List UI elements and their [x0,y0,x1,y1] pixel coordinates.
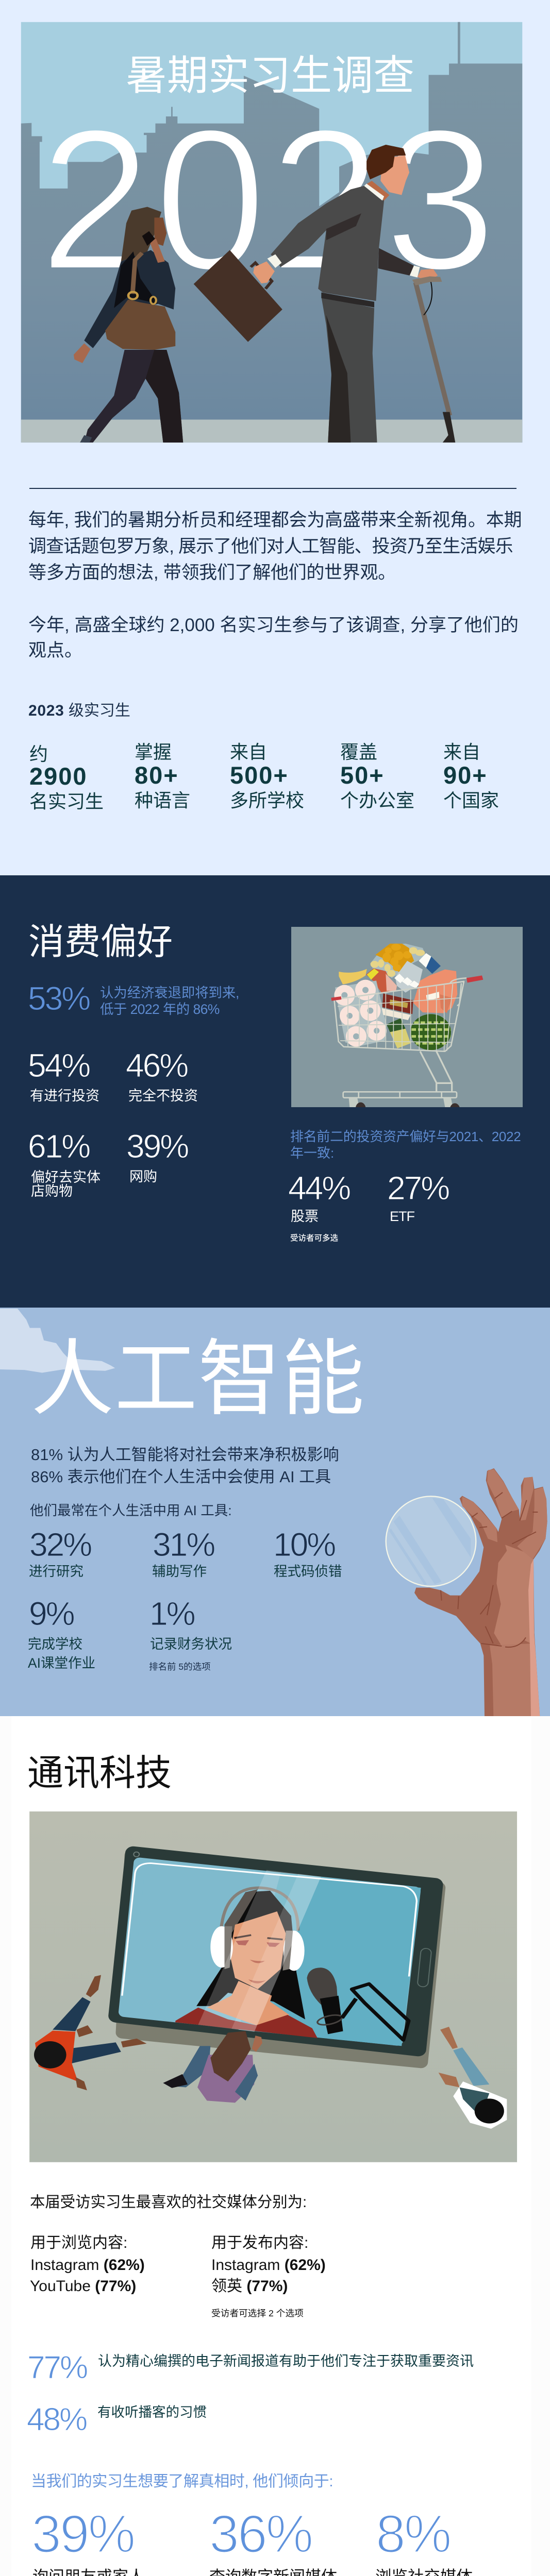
text: Instagram (62%) [30,2257,145,2274]
text: 记录财务状况 [150,1636,232,1652]
stat: 2900 interns [29,743,104,812]
section: communications background [0,1716,550,2576]
stat: 31% writing [152,1526,214,1579]
stat: 500+ schools [230,741,304,811]
illustration: giant phone with podcaster [29,1811,517,2162]
illustration: shopping cart [291,927,523,1107]
section: intro background [0,0,550,875]
text: 排名前二的投资资产偏好与2021、2022 [290,1129,521,1144]
text: 程式码侦错 [274,1564,342,1579]
section: AI background [0,1308,550,1716]
text block: intro paragraph two [28,615,519,660]
text: 86% 表示他们在个人生活中会使用 AI 工具 [31,1468,331,1486]
text: 店购物 [31,1183,73,1199]
text: 个办公室 [340,790,414,811]
subheading: seeking truth: 当我们的实习生想要了解真相时, 他们倾向于: [31,2473,333,2490]
footnote: two options: 受访者可选择 2 个选项 [211,2308,304,2318]
icon: groceries [334,944,457,1050]
text: 1% [149,1595,194,1632]
text block: top two investment preferences [290,1129,521,1161]
text: 48% [27,2402,86,2437]
text: 辅助写作 [152,1564,207,1579]
text: 用于发布内容: [211,2234,308,2251]
stats row: intern class facts [29,741,499,812]
text: 今年, 高盛全球约 2,000 名实习生参与了该调查, 分享了他们的 [28,615,519,635]
text: 39% [31,2504,134,2564]
text: 8% [376,2504,450,2564]
text: 44% [288,1170,349,1207]
intro divider rule [29,488,516,489]
text: 32% [29,1526,91,1563]
stat: 90+ countries [443,741,499,811]
stat: 48% podcasts [27,2402,207,2437]
text: 90+ [443,761,488,789]
text: 500+ [230,761,289,789]
text: 约 [29,743,48,765]
text: 77% [27,2350,87,2385]
icon: cart frame [331,975,483,1107]
stat: 44% stocks [288,1170,349,1224]
stat: 32% research [29,1526,91,1579]
stat: 27% ETF [387,1170,448,1224]
heading: artificial intelligence: 人工智能 [31,1333,365,1426]
icon: woman on phone [74,207,183,443]
icon: person in orange jacket [34,1975,146,2090]
text: 年一致: [290,1145,334,1161]
text: 54% [28,1047,89,1084]
text: 50+ [340,761,385,789]
stat: 77% curated newsletters [27,2350,474,2385]
text: 个国家 [443,790,499,811]
text: 网购 [129,1169,157,1184]
text: 每年, 我们的暑期分析员和经理都会为高盛带来全新视角。本期 [28,510,522,530]
icon: person in white jacket [439,2027,507,2129]
stat: 36% digital news [209,2504,337,2576]
text: 进行研究 [29,1564,84,1579]
text: 认为经济衰退即将到来, [100,985,239,1001]
stat: 50+ offices [340,741,414,811]
icon: person in purple top [163,2031,262,2103]
text: 27% [387,1170,448,1207]
text: 2900 [29,762,88,790]
text: 等多方面的想法, 带领我们了解他们的世界观。 [28,563,396,583]
hero title: 暑期实习生调查 [126,53,414,98]
text block: social media for browsing [30,2234,145,2295]
text: 低于 2022 年的 86% [100,1002,220,1017]
text block: AI impact [31,1446,339,1486]
hero illustration: walking figures [73,144,456,443]
text: 调查话题包罗万象, 展示了他们对人工智能、投资乃至生活娱乐 [28,536,513,556]
text: 用于浏览内容: [30,2234,127,2251]
subheading: AI personal use: 他们最常在个人生活中用 AI 工具: [30,1503,232,1518]
text: 种语言 [135,790,190,811]
stat: 46% do not invest [126,1047,198,1104]
text: 31% [153,1526,214,1563]
footnote: top 5 options: 排名前 5的选项 [149,1662,211,1672]
stat: 1% finances [149,1595,232,1652]
subheading: favorite social media: 本届受访实习生最喜欢的社交媒体分别为: [30,2194,307,2211]
heading: communications technology: 通讯科技 [27,1753,172,1793]
subheading: class of 2023: 2023 级实习生 [28,702,130,719]
icon: briefcase [194,250,282,342]
text: AI课堂作业 [28,1655,95,1671]
icon: podcaster with headphones [175,1870,321,2038]
text: 80+ [135,761,179,789]
heading: consumer preferences: 消费偏好 [28,922,173,962]
text: 偏好去实体 [31,1170,101,1185]
text: 完成学校 [28,1636,82,1652]
text: 股票 [291,1209,319,1224]
text: 认为精心编撰的电子新闻报道有助于他们专注于获取重要资讯 [98,2353,474,2369]
footnote: multiple choice: 受访者可多选 [290,1234,338,1243]
text block: intro paragraph one [28,510,522,583]
icon: man with scooter [253,145,455,443]
text: 10% [273,1526,335,1563]
text: 掌握 [135,741,172,762]
text: 来自 [230,741,267,762]
text: 39% [126,1128,188,1165]
icon: cloud [0,1309,115,1372]
stat: 10% debugging [273,1526,342,1579]
icon: phone [116,1852,439,2062]
text: 完全不投资 [128,1088,198,1104]
hero illustration background: sky and city [21,22,523,443]
stat: 39% online [126,1128,188,1184]
stat: 8% social media or forums [375,2504,473,2576]
text: 53% [28,980,89,1017]
section: consumer preferences background [0,875,550,1308]
text: 81% 认为人工智能将对社会带来净积极影响 [31,1446,339,1464]
text: ETF [390,1209,414,1224]
text: 领英 (77%) [211,2278,288,2295]
text: 多所学校 [230,790,304,811]
stat: 9% coursework [28,1595,95,1671]
icon: hand holding lens [386,1468,547,1716]
hero year 2023: 2023 [39,87,499,313]
text: 有进行投资 [30,1088,99,1104]
stat: 80+ languages [135,741,190,811]
text block: social media for posting [211,2234,326,2295]
stat: 53% recession [28,980,239,1017]
text: 36% [209,2504,312,2564]
text: 覆盖 [340,741,377,762]
stat: 39% friends and family [31,2504,144,2576]
icon: microphone [307,1968,409,2040]
text: 来自 [443,741,480,762]
text: 9% [29,1595,73,1632]
stat: 61% physical stores [28,1128,101,1199]
text: YouTube (77%) [30,2278,136,2295]
text: Instagram (62%) [211,2257,326,2274]
communications white panel [11,1716,531,2576]
text: 61% [28,1128,89,1165]
text: 观点。 [28,640,82,660]
text: 有收听播客的习惯 [97,2404,207,2420]
text: 名实习生 [29,791,104,812]
stat: 54% invest [28,1047,99,1104]
text: 46% [126,1047,187,1084]
